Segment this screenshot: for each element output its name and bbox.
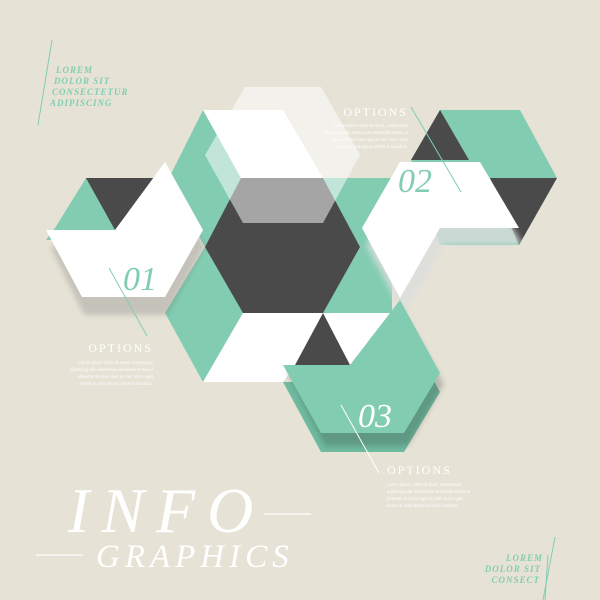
- panel 03: [283, 300, 444, 473]
- corner text: top-left: CONSECTETUR: [52, 87, 129, 97]
- corner text: top-left: DOLOR SIT: [53, 76, 110, 86]
- number 01: 01: [123, 261, 157, 298]
- dark bottom triangle: [295, 313, 350, 365]
- text block: options left: [70, 341, 154, 386]
- corner text: bottom-right: DOLOR SIT: [484, 564, 541, 574]
- text block: options top: adipiscing elit. Maecenas venenatis metus ut: [325, 130, 409, 135]
- number 02: 02: [398, 163, 432, 200]
- number 03: 03: [358, 398, 392, 435]
- corner text: bottom-right: CONSECT: [491, 575, 540, 585]
- translucent hexagon: [205, 87, 360, 223]
- text block: options bottom: Lorem ipsum dolor sit amet, consectetur: [387, 482, 462, 487]
- text block: options top: [325, 105, 409, 149]
- text block: options left: lorem ac ante ipsum primis in faucibus.: [81, 381, 153, 386]
- mint background shape: [165, 110, 392, 382]
- text block: options top: lorem ac ante ipsum primis in faucibus.: [336, 144, 408, 149]
- text block: options left: pharetra rhoncus eget ac nisl. Nunc eget: [78, 374, 154, 379]
- corner text: bottom-right: [484, 537, 555, 600]
- panel 01: [46, 162, 205, 336]
- text block: options bottom: adipiscing elit. Maecenas venenatis metus ut: [387, 489, 471, 494]
- text block: options top: pharetra rhoncus eget ac nisl. Nunc eget: [333, 137, 409, 142]
- text block: options left: Lorem ipsum dolor sit amet, consectetur: [79, 360, 154, 365]
- white top parallelogram: [203, 110, 323, 178]
- title: INFO: [67, 475, 265, 546]
- text block: options bottom: pharetra rhoncus eget ac nisl. Nunc eget: [387, 496, 463, 501]
- panel 02: [362, 107, 557, 315]
- text block: options bottom: [387, 463, 471, 508]
- text block: options left: OPTIONS: [88, 341, 153, 355]
- text block: options left: adipiscing elit. Maecenas venenatis metus ut: [70, 367, 154, 372]
- central hexagon cluster: [165, 87, 392, 382]
- corner text: bottom-right: LOREM: [505, 553, 543, 563]
- title: GRAPHICS: [96, 539, 294, 575]
- bottom white shape: [203, 313, 392, 382]
- corner text: top-left: LOREM: [55, 65, 93, 75]
- text block: options top: Lorem ipsum dolor sit amet, consectetur: [334, 123, 409, 128]
- corner text: top-left: [38, 40, 129, 125]
- corner text: top-left: ADIPISCING: [49, 98, 113, 108]
- title: [36, 475, 311, 575]
- dark central hexagon: [205, 178, 360, 313]
- text block: options top: OPTIONS: [343, 105, 408, 119]
- text block: options bottom: OPTIONS: [387, 463, 452, 477]
- text block: options bottom: lorem ac ante ipsum primis in faucibus.: [387, 503, 459, 508]
